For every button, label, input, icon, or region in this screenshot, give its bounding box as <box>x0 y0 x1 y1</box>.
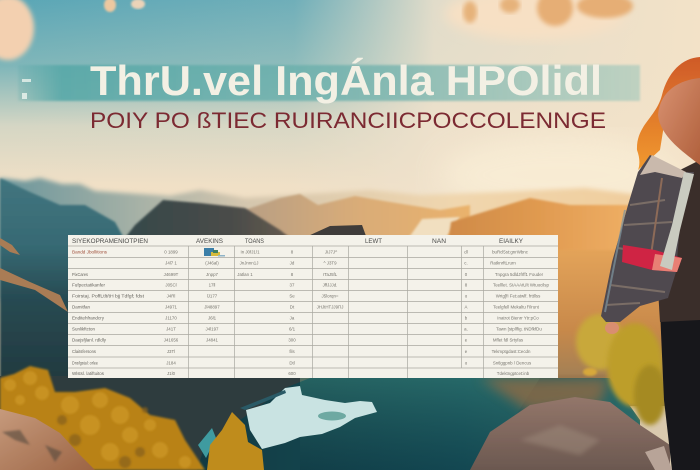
subtitle: POIY PO ßTIEC RUIRANCIICPOCCOLENNGE <box>90 108 606 133</box>
central dark mountain <box>114 200 310 400</box>
table column values: J05Cl <box>165 282 177 288</box>
sky background <box>0 0 700 300</box>
table column values: Tdektngptcet:inb <box>497 371 530 376</box>
table header: TOANS <box>245 239 264 245</box>
hand <box>605 322 619 334</box>
table column values: 6/1 <box>289 326 296 332</box>
lower dark hillside <box>0 376 300 470</box>
table column values: Inatrot Bienrr Ytr:pCo <box>497 316 539 320</box>
table column values: buRcl5st:gnrWbnc <box>492 250 529 254</box>
table grid <box>68 246 558 378</box>
table column values: Sntlggpnb / Dencus <box>493 360 532 366</box>
white water <box>246 386 377 449</box>
traveller <box>601 57 700 470</box>
table column values: Tnpgra 5dldJfrff1 Fouder <box>495 272 544 277</box>
table column values: 8 <box>465 282 468 288</box>
table column values: Mflet fdl Srtyfas <box>493 338 524 342</box>
table column values: J41T <box>166 326 176 332</box>
table row labels: Foirstaj. PoffLtlt/tH bjj Tdfgf; fdst <box>72 294 145 298</box>
table column values: JHJtHTJJ9ПJ <box>317 304 343 310</box>
table column values: 600 <box>288 371 296 376</box>
table column values: J4699T <box>164 272 179 277</box>
table column values: e <box>465 338 468 342</box>
far ridge <box>0 178 700 300</box>
table column values: Tawn [stpllfIg. tNDfkfDu <box>496 326 542 332</box>
dark torso <box>655 160 700 322</box>
table column values: JIJ7J^ <box>325 250 338 254</box>
river <box>380 217 460 255</box>
table column values: J6ł1 <box>208 316 217 320</box>
table column values: J4Rl <box>167 294 175 298</box>
table header: AVEKINS <box>196 239 223 245</box>
left blue hills and dark slope <box>0 178 125 400</box>
plaid jacket <box>601 155 694 322</box>
mini chart thumbnail <box>204 248 225 256</box>
table column values: b <box>465 316 468 320</box>
table column values: 37 <box>290 282 295 288</box>
table column values: In J0fJ1/1 <box>240 250 260 254</box>
table column values: Jnpp7 <box>206 272 219 277</box>
table row labels: Dnsfgstal: orlee <box>72 360 98 366</box>
title band <box>18 57 640 104</box>
table column values: J4l7 1 <box>165 260 177 266</box>
right mountain <box>447 198 630 250</box>
table header: LEWT <box>365 239 382 245</box>
table column values: Teelllet. StAAAtUlt Wtuocilsp <box>493 282 549 288</box>
table column values: 8 <box>291 250 294 254</box>
table column values: o <box>465 360 468 366</box>
table row labels <box>72 250 145 376</box>
table column values: JnJnnn1J <box>240 260 258 266</box>
yellow shrub behind traveller <box>576 314 666 425</box>
table column values: fils <box>289 349 295 354</box>
legs <box>660 305 700 470</box>
table row labels: Damitfan <box>72 304 90 310</box>
slope highlights <box>0 238 68 312</box>
hazy middle peaks <box>245 194 470 260</box>
table column values: 0 <box>465 272 468 277</box>
table column values: JffJJJd. <box>323 282 337 288</box>
table column values: Jatlan 1 <box>237 272 253 277</box>
table column values: o <box>465 294 468 298</box>
clouds <box>0 0 633 60</box>
small dark ridge beside table <box>308 225 366 236</box>
table column values: c. <box>464 260 468 266</box>
table column values: rTaJ5fL <box>323 272 338 277</box>
table column values: lJ177 <box>207 294 218 298</box>
table column values: Tekmptgdast:Cecdn <box>492 349 531 354</box>
table column values: RatknrftLrurn <box>490 260 516 266</box>
table column values: ^ J3T9 <box>323 260 337 266</box>
lake <box>197 378 640 470</box>
table row labels: Daejsfjlanl. rdldly <box>72 338 107 342</box>
table column values: Dt <box>290 304 295 310</box>
mountain landscape <box>0 178 700 470</box>
valley haze <box>385 236 700 406</box>
table row labels: Claitsfersons <box>72 349 97 354</box>
table column values: 17ll <box>209 282 215 288</box>
table column values: 0 1899 <box>164 250 178 254</box>
table column values: e <box>465 349 468 354</box>
hiking shoe <box>645 446 672 470</box>
table row labels: Enditehfrandcry <box>72 316 105 320</box>
table column values <box>164 250 549 376</box>
table header: SIYEKOPRAMENIOTPIEN <box>72 239 148 245</box>
table row labels: Fufpectatikanfer <box>72 282 105 288</box>
backpack <box>658 78 700 165</box>
table column values: 300 <box>288 338 296 342</box>
foreground conifer <box>207 412 264 470</box>
table column values: A <box>465 304 468 310</box>
title text: ThrU.vel IngÁnla HPOlidl <box>90 57 602 104</box>
table column values: J3Tl <box>167 349 175 354</box>
table column values: J184 <box>166 360 176 366</box>
table header: EIAILKY <box>499 239 523 245</box>
table column values: Jd <box>290 260 295 266</box>
table column values: J41656 <box>164 338 179 342</box>
table column values: Ja <box>290 316 295 320</box>
table column values: J4841 <box>206 338 219 342</box>
right foreground rock <box>470 397 670 470</box>
table row labels: Bandd Jbollitions <box>72 250 108 254</box>
table column values: J5lorqn= <box>322 294 339 298</box>
table column values: (J46al) <box>205 260 219 266</box>
table column values: 8 <box>291 272 294 277</box>
table column values: J1l0 <box>167 371 176 376</box>
table header <box>72 239 523 245</box>
table column values: Wrtg[fI Fet:atwlf. frttllss <box>496 294 541 298</box>
table column values: Dtl <box>289 360 295 366</box>
table column values: J4l197 <box>206 326 219 332</box>
table row labels: Sunlikftcton <box>72 326 95 332</box>
left foreground rock <box>0 409 95 470</box>
golden trees <box>0 366 264 470</box>
table column values: a. <box>464 326 468 332</box>
table column values: Se <box>289 294 295 298</box>
table row labels: Wlstsl. latiftuitos <box>72 371 105 376</box>
data table <box>68 235 558 378</box>
table column values: Teelgfell Mekaltu f'Ilrunt <box>493 304 540 310</box>
table column values: J4971 <box>165 304 178 310</box>
table header: NAN <box>432 239 446 245</box>
hair <box>637 57 700 170</box>
table column values: J1170 <box>165 316 177 320</box>
table column values: Jl48897 <box>204 304 220 310</box>
table row labels: PixCares <box>72 272 89 277</box>
table column values: dl <box>464 250 468 254</box>
